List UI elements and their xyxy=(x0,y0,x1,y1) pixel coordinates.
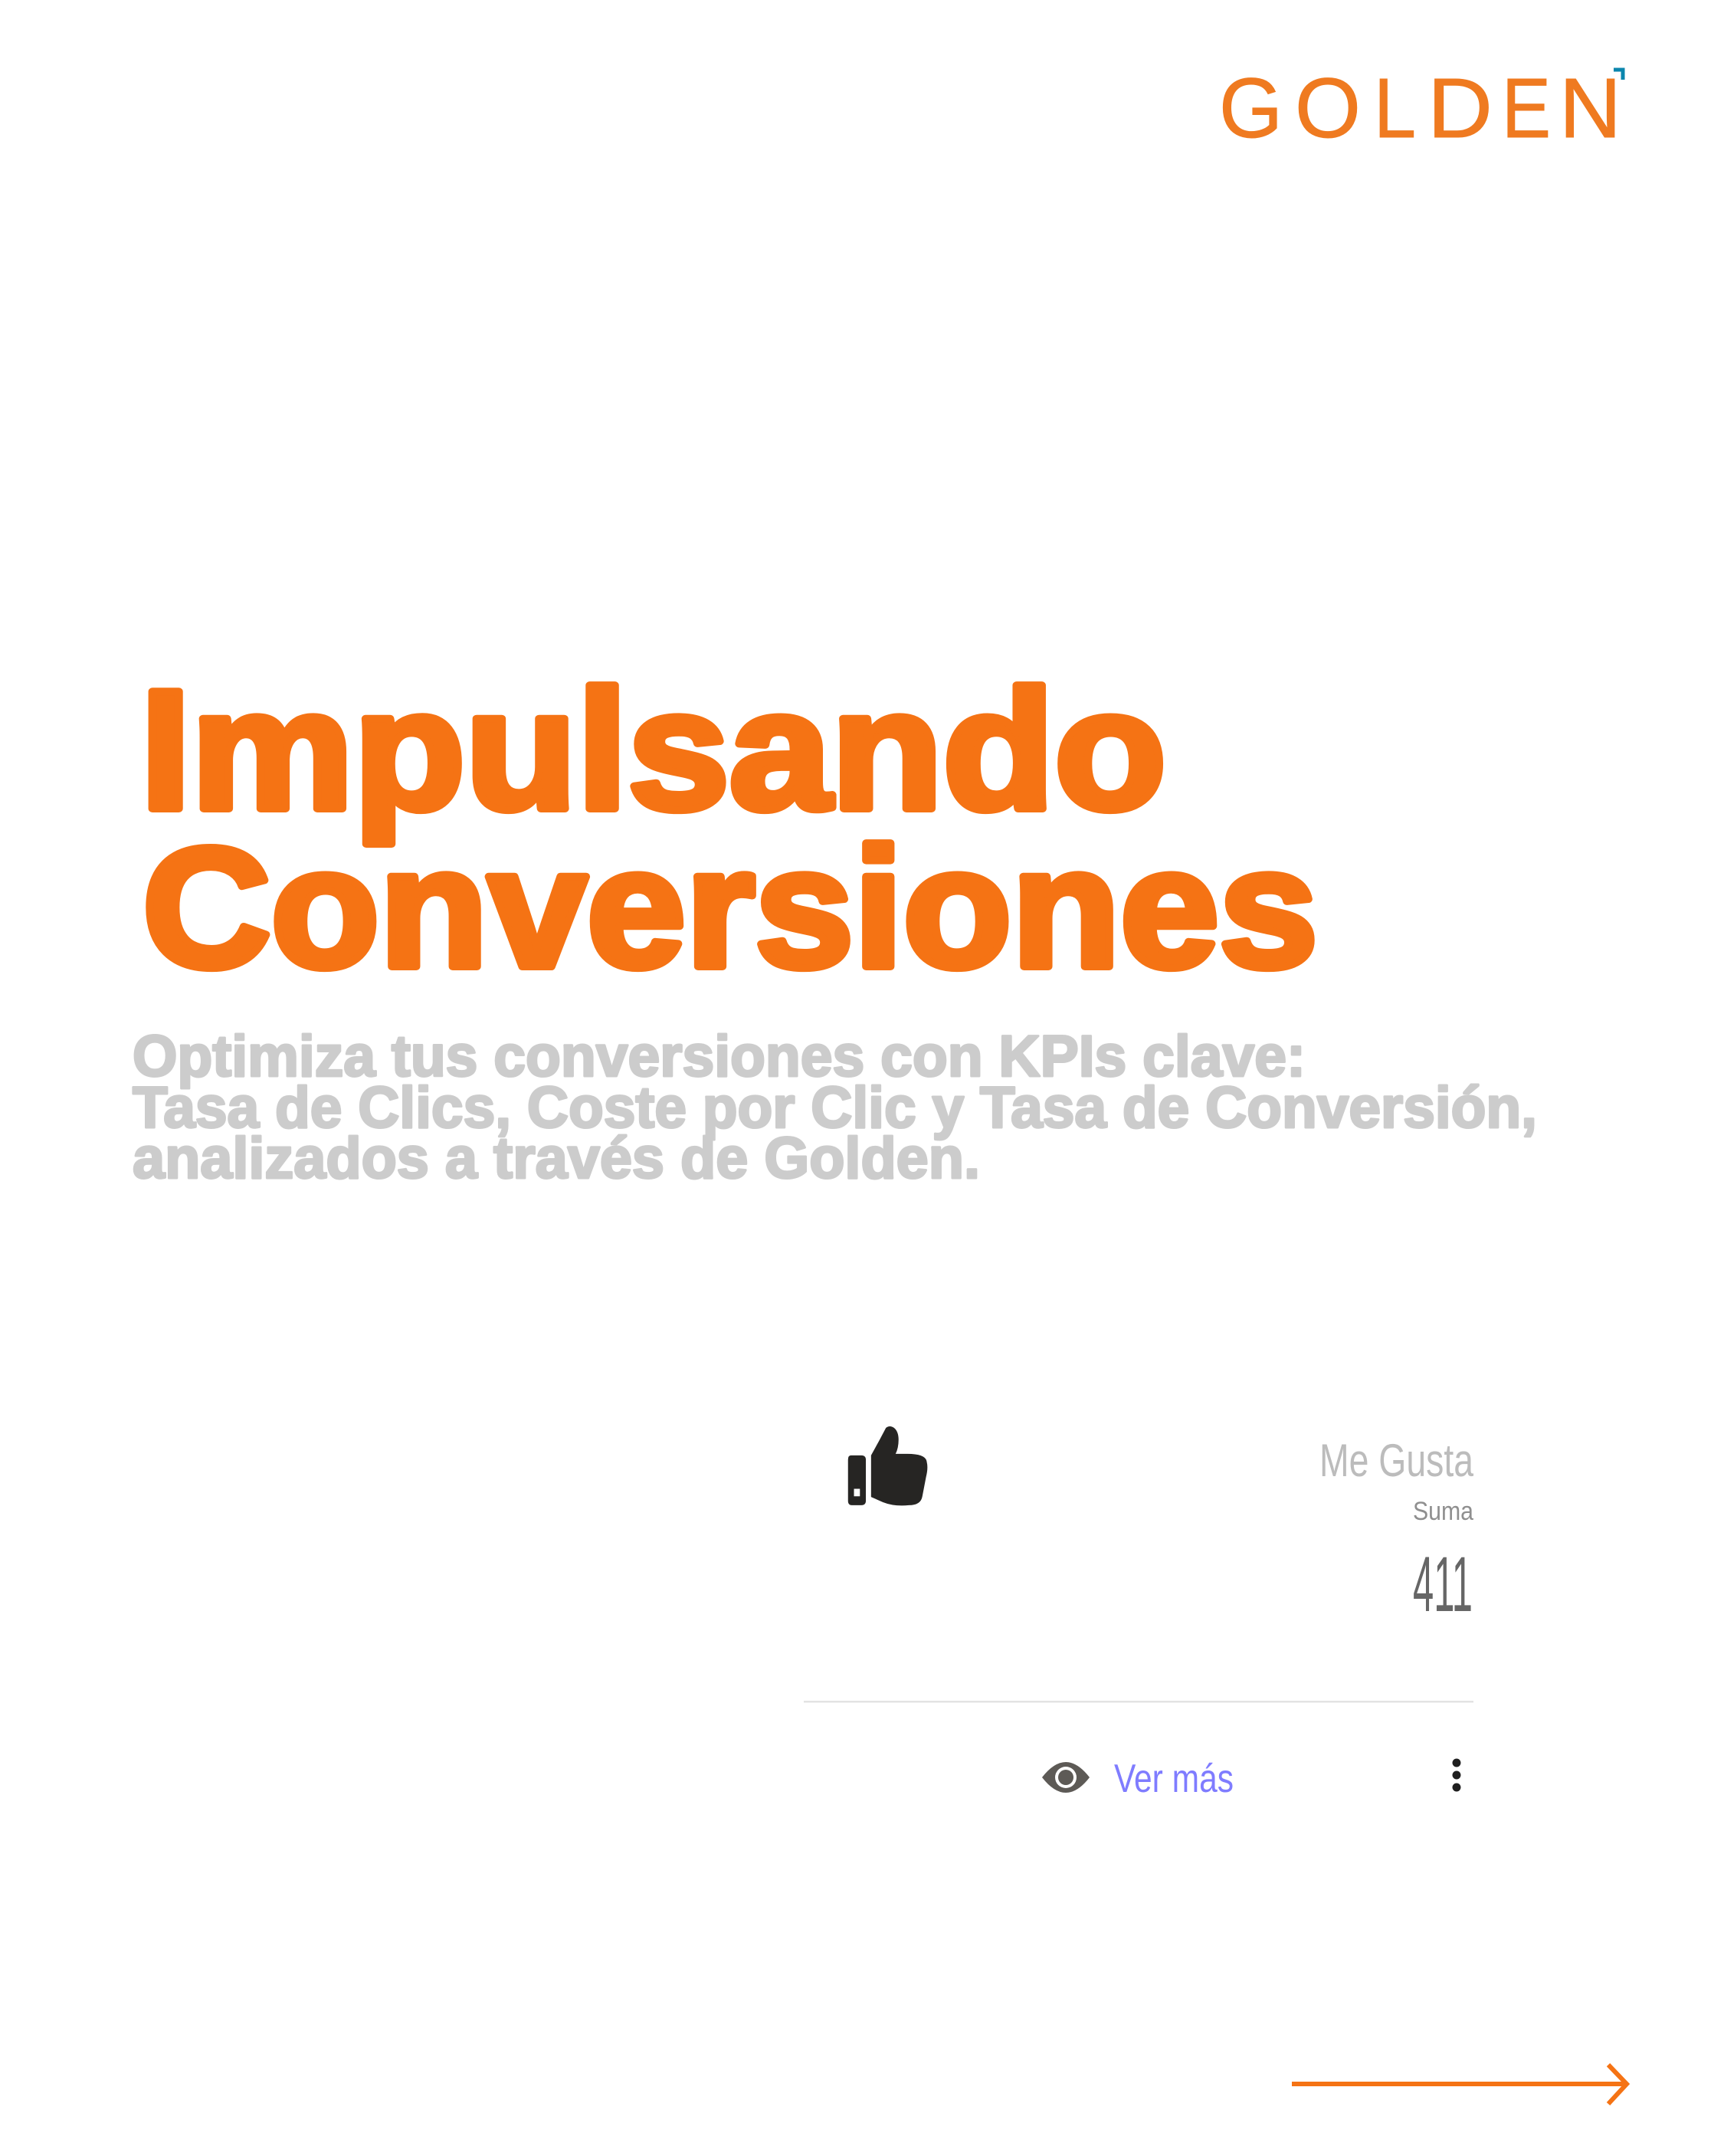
link: Ver más: Ver más xyxy=(1114,1757,1234,1801)
subtitle: Optimiza tus conversiones con KPIs clave: xyxy=(133,1024,1306,1089)
logo: GOLDEN: D xyxy=(1427,61,1493,156)
title xyxy=(140,655,1318,1003)
subtitle: analizados a través de Golden. xyxy=(133,1126,980,1191)
logo: GOLDEN: E xyxy=(1502,61,1551,156)
subtitle xyxy=(133,1024,1537,1191)
logo: GOLDEN xyxy=(1219,61,1623,156)
logo: GOLDEN: O xyxy=(1295,61,1361,156)
logo: GOLDEN: L xyxy=(1374,61,1416,156)
title: Conversiones xyxy=(143,813,1318,1003)
logo: GOLDEN: N xyxy=(1559,61,1621,156)
icon: more menu dots xyxy=(1453,1758,1460,1792)
text: 411 xyxy=(1413,1541,1473,1628)
KPI card: Me Gusta xyxy=(804,1426,1473,1801)
arrow xyxy=(1292,2065,1627,2104)
logo: GOLDEN: G xyxy=(1219,61,1283,156)
icon: eye xyxy=(1042,1762,1090,1793)
divider xyxy=(804,1701,1473,1703)
subtitle: Tasa de Clics, Coste por Clic y Tasa de Conversión, xyxy=(133,1075,1537,1140)
label: Suma: Suma xyxy=(1413,1497,1473,1526)
title: Impulsando xyxy=(140,655,1166,845)
icon: thumbs up xyxy=(848,1426,927,1505)
label: Me Gusta: Me Gusta xyxy=(1319,1435,1473,1486)
